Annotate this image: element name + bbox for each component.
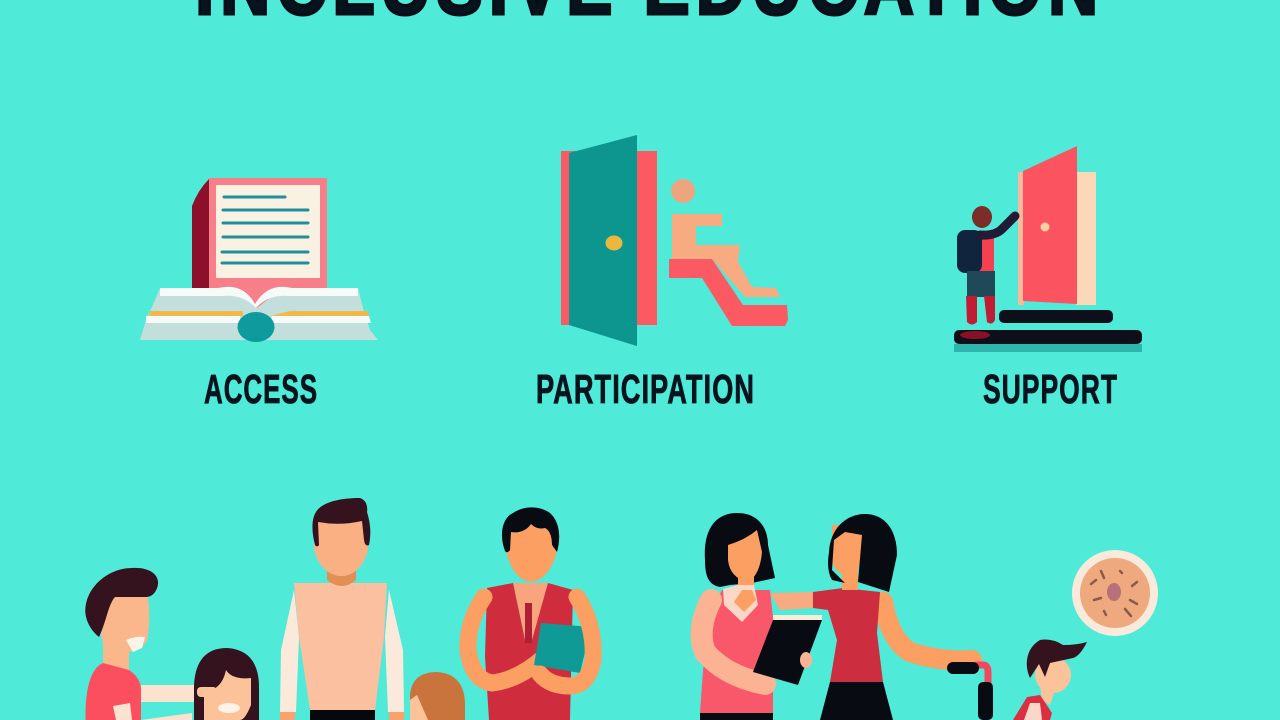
icon: wheelchair user — [669, 179, 788, 326]
person: teacher with book — [468, 507, 593, 720]
group: left family illustration — [85, 498, 593, 720]
person: girl — [194, 648, 259, 720]
group: right people illustration — [700, 513, 1158, 720]
label: participation: PARTICIPATION — [536, 366, 755, 412]
icon: door — [1018, 146, 1096, 305]
person: orange-haired child — [410, 672, 465, 720]
icon: book — [140, 178, 378, 342]
icon: person with backpack — [957, 206, 1015, 324]
label: access: ACCESS — [204, 366, 318, 412]
icon: thought bubble circle — [1072, 550, 1158, 636]
icon: open door — [561, 135, 657, 346]
panel: participation — [536, 135, 788, 412]
person: tall man — [280, 498, 404, 720]
panel: access — [140, 178, 378, 412]
person: boy — [1013, 640, 1087, 720]
person: woman with tablet — [700, 513, 822, 720]
label: support: SUPPORT — [983, 366, 1118, 412]
person: smiling man — [85, 568, 198, 720]
panel: support — [954, 146, 1142, 412]
icon: walker handle — [947, 662, 993, 720]
icon: steps — [954, 310, 1142, 352]
person: woman with walker — [770, 514, 972, 720]
